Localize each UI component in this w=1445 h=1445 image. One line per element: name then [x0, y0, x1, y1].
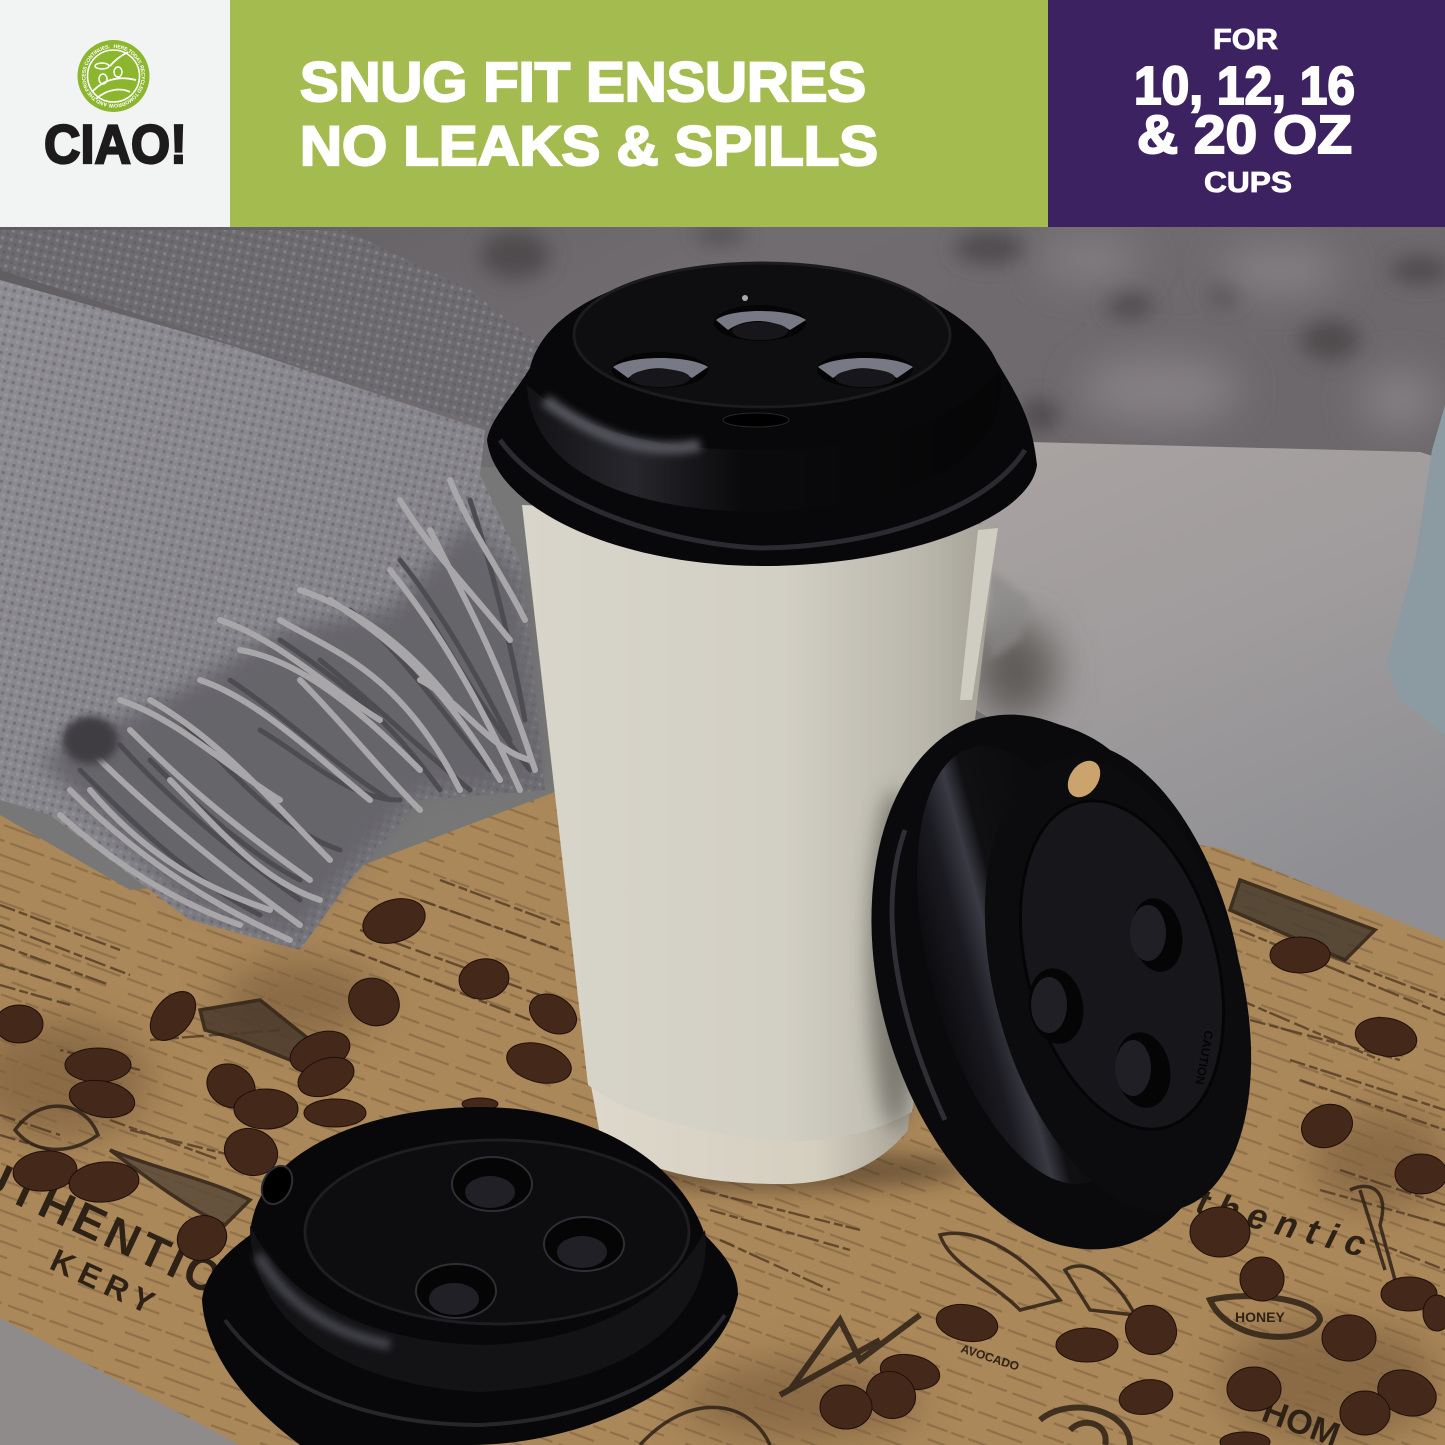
- black lid on cup: [487, 263, 1037, 566]
- size label: cups: CUPS: [1204, 167, 1292, 199]
- leaning lid recess: [987, 778, 1257, 1152]
- headline line 2: NO LEAKS & SPILLS: [300, 114, 878, 177]
- kraft newspaper sheet: [0, 790, 1445, 1445]
- newspaper word: honey: HONEY: [1235, 1309, 1285, 1325]
- headline line 1: SNUG FIT ENSURES: [300, 50, 866, 113]
- cloth fringe: [60, 480, 535, 940]
- coffee beans scattered: [0, 891, 1445, 1445]
- white paper cup: [522, 505, 998, 1190]
- brand name: CIAO!: [44, 113, 187, 175]
- background: stone wall: [0, 227, 1445, 467]
- black lid leaning on cup: [815, 674, 1297, 1290]
- leaning lid dimples: [1023, 894, 1188, 1112]
- size label: for: FOR: [1213, 24, 1278, 56]
- sizes line 2: & 20 OZ: [1137, 105, 1352, 165]
- lying lid dimples: [416, 1157, 624, 1318]
- lying lid vent hole: [256, 1161, 298, 1209]
- icon: green recycling badge: HERE TODAY, RECYCLED TOMORROW. AND THE PROCESS CONTINUES.: [82, 44, 146, 108]
- lid top recess: [574, 263, 950, 407]
- lid sip slot: [723, 413, 789, 427]
- newspaper word: bakery: KERY: [45, 1242, 160, 1321]
- lid embossed caution text: CAUTION: [1193, 1029, 1216, 1086]
- newspaper word: avocado: AVOCADO: [959, 1342, 1021, 1374]
- sizes line 1: 10, 12, 16: [1134, 56, 1355, 116]
- glass object at right edge: [1386, 405, 1445, 735]
- header panel: cup sizes: [1048, 0, 1445, 227]
- leaning lid vent hole: [1061, 755, 1107, 803]
- grey knitted cloth: [0, 230, 1030, 950]
- header panel: logo: [0, 0, 230, 227]
- lid sip holes: [612, 305, 913, 388]
- newspaper print lines: [0, 880, 1445, 1290]
- lying lid recess: [305, 1140, 689, 1324]
- black lid lying on paper: [202, 1107, 738, 1445]
- header panel: headline: [230, 0, 1048, 227]
- background: table surface: [0, 441, 1445, 1445]
- newspaper word: authentic right: Authentic: [1127, 1163, 1370, 1265]
